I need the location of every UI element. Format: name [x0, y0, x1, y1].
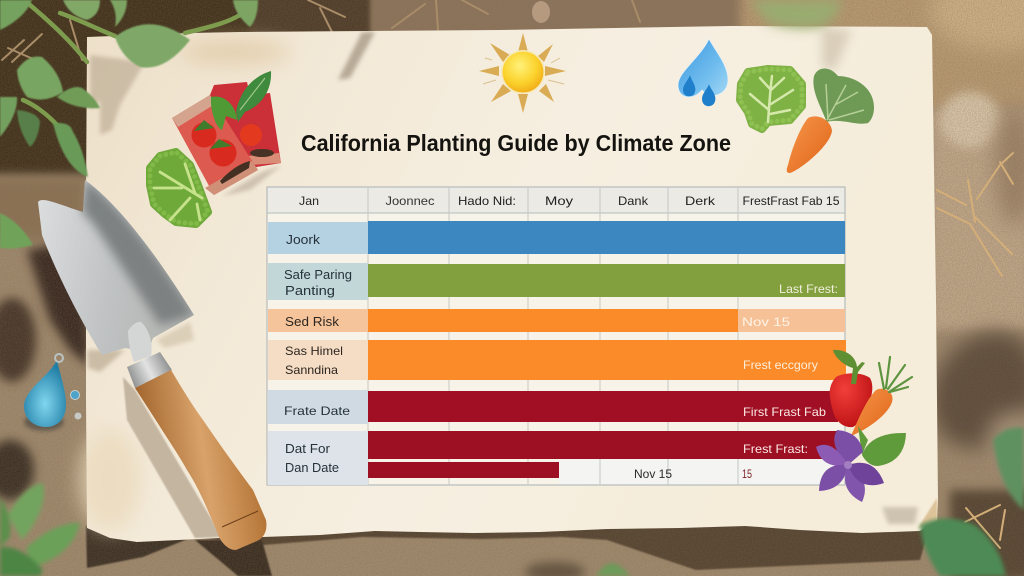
row: orange risk bar: Nov 15: [742, 315, 790, 329]
icon: lettuce top: [740, 69, 802, 129]
trowel blade: [38, 178, 194, 362]
torn paper sheet: [80, 26, 938, 542]
row: red first frost bars: Dat For: [285, 442, 330, 456]
foliage: top-left vine: [0, 0, 258, 249]
row: blue bar: Joork: [286, 232, 321, 247]
row: orange seasonal bar: Frest eccgory: [743, 358, 818, 372]
foliage: bottom-left plant: [0, 483, 80, 576]
trowel handle: [135, 370, 266, 550]
table header row: Joonnec: [386, 194, 434, 208]
table header row: Jan: [299, 194, 319, 208]
row: red first frost bars: Nov 15: [634, 467, 672, 481]
row: blue bar: [268, 221, 845, 254]
table header row: Moy: [545, 194, 573, 208]
row: green safe planting bar: [268, 263, 845, 300]
row: green safe planting bar: Panting: [285, 284, 335, 298]
row: orange risk bar: Sed Risk: [285, 315, 340, 329]
shadow under paper: [86, 525, 930, 570]
table header row: Dank: [618, 194, 649, 208]
trowel ferrule: [127, 352, 172, 388]
back packet: [210, 82, 281, 168]
row: orange seasonal bar: Sas Himel: [285, 344, 343, 358]
table header row: [267, 188, 845, 213]
row: orange risk bar: [268, 309, 845, 332]
row: red first frost bars: Dan Date: [285, 461, 339, 475]
soil: dark top-left: [0, 0, 270, 175]
foliage: bottom-right plant: [596, 0, 1024, 576]
icon: lettuce left: [150, 152, 208, 224]
row: green safe planting bar: Safe Paring: [284, 268, 352, 282]
row: red date bar: First Frast Fab: [743, 405, 826, 419]
table header row: Derk: [685, 194, 716, 208]
icon: pepper and carrot: [830, 350, 912, 436]
table header row: Hado Nid:: [458, 194, 516, 208]
front packet: [172, 95, 258, 195]
title: California Planting Guide by Climate Zone: [301, 130, 731, 156]
row: red first frost bars: Frest Frast:: [743, 442, 808, 456]
row: red first frost bars: 15: [742, 467, 752, 481]
row: red first frost bars: [268, 431, 838, 485]
soil: right side lights and shadow: [930, 110, 1024, 330]
soil: straw and stone: [937, 153, 1013, 548]
paper: trowel shadows: [123, 377, 222, 538]
row: orange seasonal bar: Sanndina: [285, 363, 338, 377]
icon: sun: [479, 33, 566, 113]
icon: seed packets with tomatoes: [172, 71, 282, 196]
row: green safe planting bar: Last Frest:: [779, 282, 838, 296]
icon: water droplet on soil: [24, 354, 82, 431]
table: planting calendar: [267, 187, 846, 485]
paper: leaf shadows: [90, 55, 145, 135]
icon: hand trowel: [38, 178, 266, 550]
icon: water drop with small drops: [678, 39, 728, 106]
icon: carrot with leaves: [787, 68, 874, 173]
icon: purple flower with leaf: [816, 426, 906, 502]
table header row: FrestFrast Fab 15: [742, 194, 840, 208]
row: orange seasonal bar: [268, 340, 846, 380]
soil: left side: [0, 178, 85, 240]
row: red date bar: [268, 390, 838, 424]
row: red date bar: Frate Date: [284, 404, 350, 418]
